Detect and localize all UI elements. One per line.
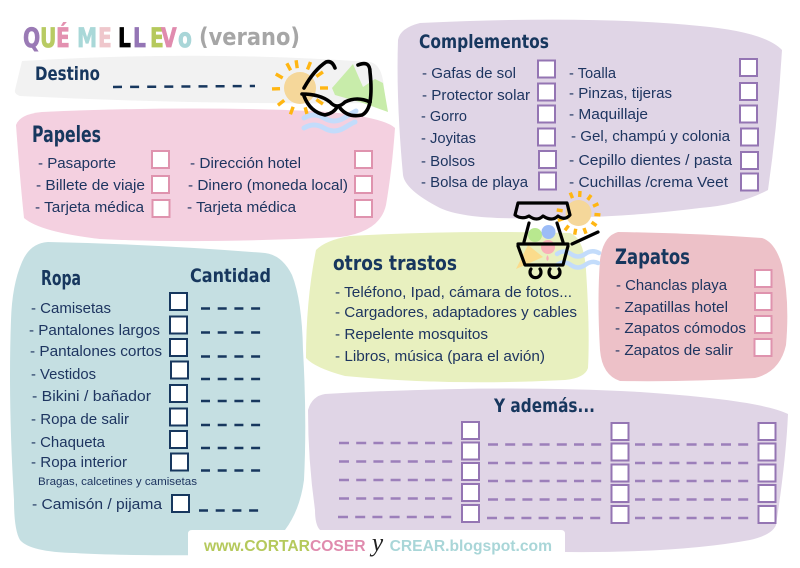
icon: ice cream cart with sun (515, 191, 600, 278)
checklist: papeles right: - Dinero (moneda local) (188, 177, 348, 194)
checkboxes column 3 (758, 423, 776, 523)
checklist: complementos left: - Protector solar (422, 87, 530, 104)
checklist: ropa items: - Ropa de salir (31, 411, 129, 428)
checklist: papeles left: - Pasaporte (38, 155, 116, 172)
footer: website (188, 528, 565, 568)
icon: sun and sunglasses (272, 60, 388, 131)
list: otros trastos: - Teléfono, Ipad, cámara de fotos... (335, 284, 572, 301)
checklist: papeles right: - Tarjeta médica (187, 199, 297, 216)
checkboxes column 1 (462, 422, 479, 522)
title: o (178, 22, 192, 54)
destino write-in line (113, 86, 255, 87)
write-in lines column 2 (487, 444, 602, 518)
checklist: papeles left: - Billete de viaje (36, 177, 145, 194)
panel: ropa (10, 242, 305, 555)
checklist: complementos right: - Cuchillas /crema Veet (569, 174, 729, 191)
checklist: ropa items: - Vestidos (31, 366, 96, 383)
write-in lines column 1 (338, 443, 453, 517)
title: V (161, 22, 177, 54)
title (23, 22, 300, 54)
checklist: ropa items: - Pantalones cortos (30, 343, 162, 360)
checklist: papeles left: - Tarjeta médica (35, 199, 145, 216)
title: É (56, 22, 77, 54)
panel: otros trastos (306, 232, 589, 382)
checklist: zapatos: - Zapatos de salir (615, 342, 733, 359)
checklist: complementos left: - Gafas de sol (422, 65, 516, 82)
list: otros trastos: - Repelente mosquitos (335, 326, 488, 343)
heading: y además: Y además... (493, 395, 595, 417)
heading: papeles: Papeles (32, 123, 101, 148)
checklist: zapatos (615, 270, 772, 359)
footer: website: www.CORTARCOSER y CREAR.blogspot.com (203, 528, 552, 557)
checklist: complementos left: - Joyitas (421, 130, 476, 147)
heading: destino: Destino (35, 63, 100, 85)
title: E (98, 22, 119, 54)
heading: zapatos: Zapatos (615, 245, 690, 269)
checklist: complementos left: - Bolsos (421, 153, 475, 170)
checklist: complementos right: - Cepillo dientes / pasta (569, 152, 733, 169)
checklist: ropa items: Bragas, calcetines y camisetas (38, 476, 198, 488)
checkboxes: ropa (170, 293, 189, 512)
checklist: ropa items: - Pantalones largos (29, 322, 160, 339)
quantity lines: ropa (199, 308, 261, 510)
checklist: ropa items: - Camisón / pijama (32, 496, 163, 513)
panel: complementos (398, 20, 782, 218)
checklist: papeles right (187, 151, 372, 217)
checklist: ropa items: - Chaqueta (31, 434, 106, 451)
checklist: zapatos: - Zapatos cómodos (615, 320, 746, 337)
checklist: complementos right: - Toalla (569, 65, 617, 82)
checklist: complementos right: - Maquillaje (569, 106, 648, 123)
title: L (118, 22, 131, 54)
panel: destino (15, 56, 386, 103)
checklist: complementos left (421, 60, 556, 191)
title: U (40, 22, 56, 54)
list: otros trastos: - Libros, música (para el avión) (335, 348, 545, 365)
title: M (77, 22, 97, 54)
checkboxes column 2 (612, 423, 628, 523)
panel: y además (308, 388, 788, 552)
heading: complementos: Complementos (419, 31, 549, 53)
checklist: ropa items: - Bikini / bañador (32, 388, 151, 405)
heading: otros trastos: otros trastos (333, 251, 457, 275)
title: (verano) (199, 23, 300, 51)
panel: zapatos (598, 232, 787, 381)
checklist: complementos right (569, 59, 758, 191)
title: L (133, 22, 146, 54)
title: Q (23, 22, 40, 54)
list: otros trastos (335, 284, 577, 365)
checklist: zapatos: - Zapatillas hotel (615, 299, 728, 316)
list: otros trastos: - Cargadores, adaptadores y cables (335, 304, 577, 321)
checklist: complementos left: - Bolsa de playa (421, 174, 529, 191)
checklist: complementos right: - Pinzas, tijeras (569, 85, 672, 102)
checklist: ropa items: - Camisetas (31, 300, 111, 317)
title: E (150, 22, 164, 54)
panel: papeles (16, 108, 395, 241)
checklist: complementos right: - Gel, champú y colonia (571, 128, 731, 145)
heading: ropa: Ropa (41, 266, 81, 290)
checklist: ropa items (29, 300, 198, 513)
checklist: complementos left: - Gorro (421, 108, 467, 125)
checklist: ropa items: - Ropa interior (31, 454, 127, 471)
write-in lines column 3 (635, 444, 749, 518)
checklist: papeles right: - Dirección hotel (190, 155, 301, 172)
checklist: zapatos: - Chanclas playa (616, 277, 728, 294)
heading: cantidad: Cantidad (190, 265, 271, 287)
checklist: papeles left (35, 151, 170, 217)
